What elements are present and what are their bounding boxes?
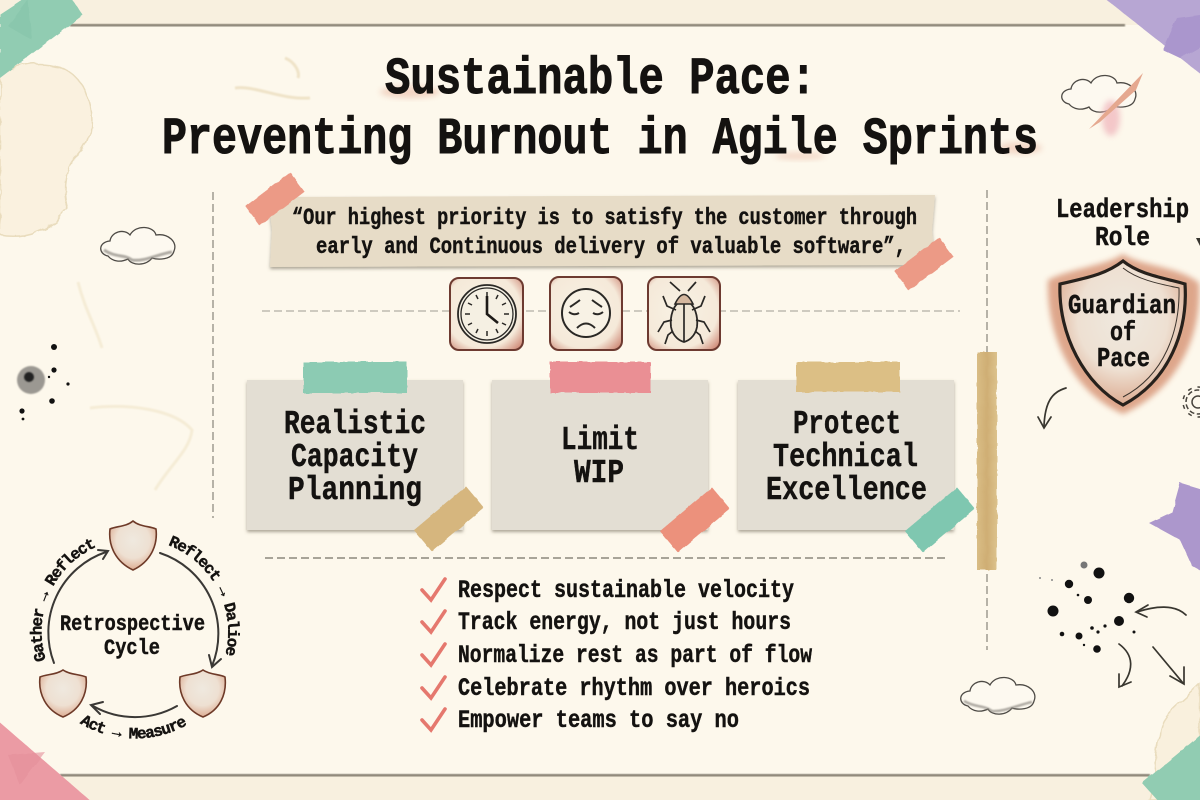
cloud: top right: [1062, 75, 1136, 112]
cycle label paths: [42, 546, 98, 660]
item 5: Empower teams to say no: [458, 706, 739, 735]
quote text: early and Continuous delivery of valuable software”,: [316, 234, 906, 260]
card: Limit WIP: [492, 380, 708, 530]
retrospective cycle: [4, 520, 240, 745]
arrow: curved down: [1119, 644, 1131, 687]
title: Sustainable Pace:: [385, 50, 816, 109]
card: Protect Technical Excellence: Technical: [773, 439, 918, 476]
card: Protect Technical Excellence: [738, 380, 954, 530]
cycle centre label: Cycle: [104, 636, 160, 661]
cloud: bottom right: [961, 677, 1035, 714]
cycle centre label: Retrospective: [60, 612, 205, 637]
arrow: diagonal down: [1153, 647, 1184, 684]
card: Limit WIP: WIP: [574, 455, 624, 492]
cycle label: left: Gather → Reflect: [30, 539, 96, 662]
item 3: Normalize rest as part of flow: [458, 641, 812, 670]
leadership heading: Role: [1095, 224, 1150, 254]
tape: vertical tan strip: [977, 352, 997, 570]
stain: middle left: [78, 282, 192, 490]
card: Realistic Capacity Planning: Planning: [288, 472, 422, 509]
icon: bug: [648, 277, 720, 350]
cycle shield: left: [40, 670, 86, 717]
icon: gear: [1183, 387, 1200, 417]
tape: card 2 top: [550, 362, 651, 393]
cycle shield: top: [110, 521, 156, 570]
item 2: Track energy, not just hours: [458, 608, 791, 637]
corner tape: teal top left: [0, 0, 83, 78]
corner tape: teal bottom right: [1142, 733, 1200, 800]
cycle centre label: [60, 612, 205, 661]
card: Realistic Capacity Planning: [247, 380, 463, 530]
card: Protect Technical Excellence: Protect: [793, 406, 901, 443]
tape: card 1 corner: [414, 486, 484, 552]
pencil tape over cloud: [1089, 73, 1143, 136]
icon: tired face: [550, 277, 622, 350]
ink splatter: right: [1039, 562, 1136, 653]
stain: lower right: [1150, 685, 1200, 800]
tape: card 1 top: [303, 362, 407, 393]
layout dashed guides: [213, 190, 987, 650]
stain: top edge wisp: [235, 58, 310, 98]
cycle arrows: [48, 550, 221, 717]
icon: clock: [450, 278, 523, 350]
quote strip: [268, 195, 935, 267]
cloud: left: [101, 227, 175, 264]
title: [162, 50, 1042, 169]
cycle shield: right: [180, 670, 225, 717]
quote text: “Our highest priority is to satisfy the customer through: [292, 205, 917, 231]
checklist: [422, 576, 812, 735]
arrow: below shield left: [1038, 388, 1066, 428]
card: Realistic Capacity Planning: Capacity: [291, 439, 418, 476]
tape: card 2 corner: [660, 487, 730, 553]
item 4: Celebrate rhythm over heroics: [458, 674, 810, 703]
arrow: into splatter: [1136, 605, 1186, 617]
card: Limit WIP: Limit: [561, 422, 639, 459]
corner tape: pink bottom left: [0, 720, 93, 800]
quote text: [292, 205, 917, 260]
tape: card 3 corner: [905, 487, 975, 553]
ink splatter: left: [17, 344, 70, 420]
arrow: top of right edge: [1196, 238, 1200, 246]
card: Realistic Capacity Planning: Realistic: [284, 406, 426, 443]
tape: quote top left: [245, 173, 305, 225]
cycle label: right: Reflect → Dalioe: [168, 535, 240, 656]
tape: card 3 top: [796, 362, 900, 392]
shield: Guardian of Pace: of: [1110, 319, 1136, 349]
card: Protect Technical Excellence: Excellence: [766, 472, 927, 509]
item 1: Respect sustainable velocity: [458, 576, 794, 605]
corner tape: purple top right: [1103, 0, 1200, 76]
shield: Guardian of Pace: Pace: [1097, 345, 1150, 375]
leadership heading: [1056, 196, 1189, 254]
shield: Guardian of Pace: Guardian: [1068, 292, 1176, 322]
tape: quote bottom right: [894, 238, 954, 290]
shield: Guardian of Pace: [1048, 254, 1199, 414]
side tape: purple right: [1149, 483, 1200, 572]
cycle label: bottom: Act → Measure: [79, 715, 186, 739]
coffee stain: upper left: [0, 63, 91, 236]
